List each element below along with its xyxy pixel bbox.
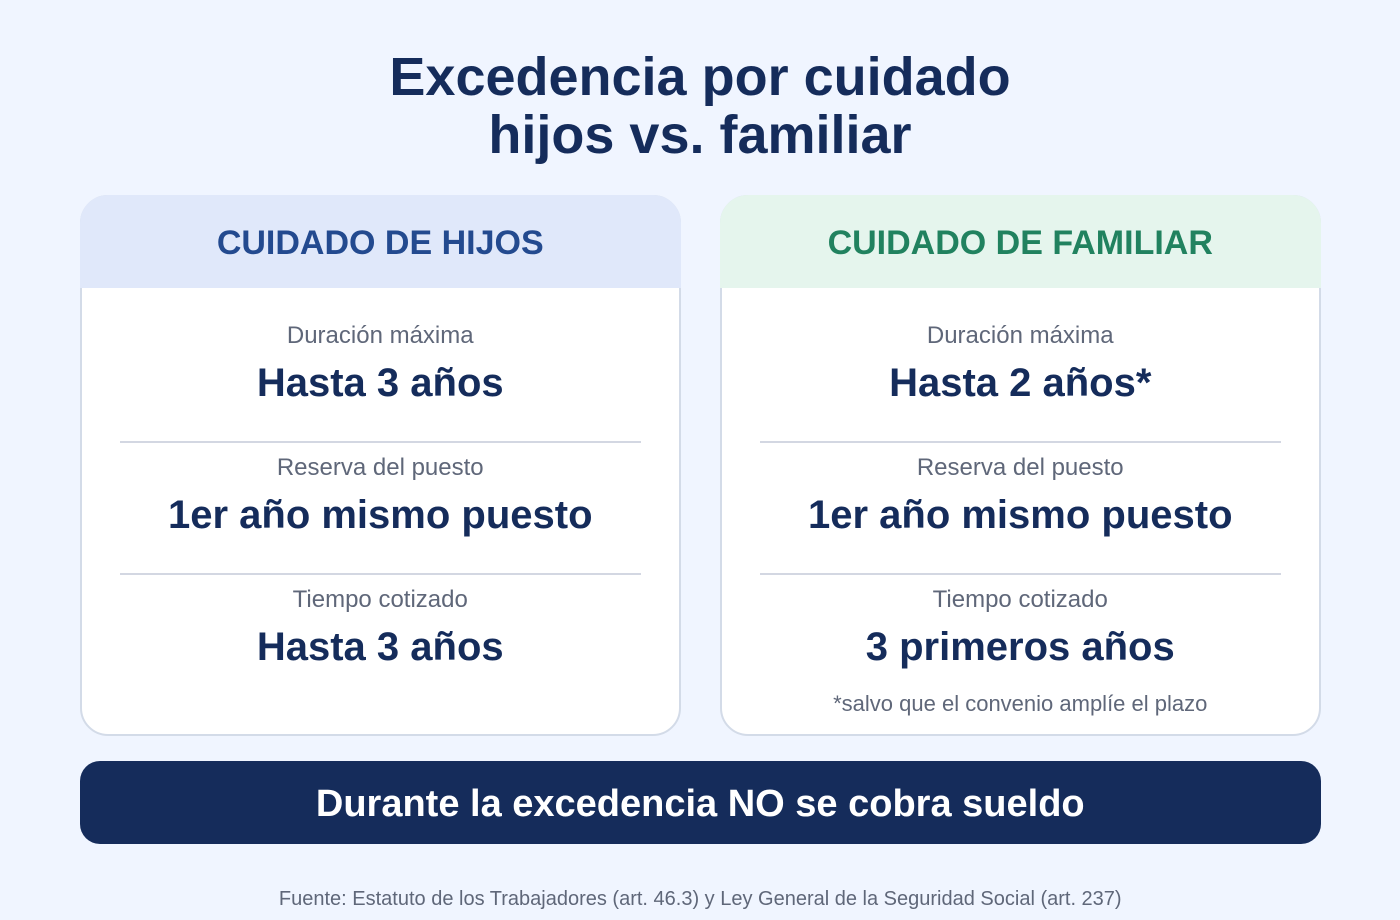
panel heading: cuidado de familiar: CUIDADO DE FAMILIAR (828, 224, 1213, 262)
label: tiempo cotizado: Tiempo cotizado (933, 586, 1108, 613)
value: duración: Hasta 2 años* (889, 361, 1151, 405)
value: duración: Hasta 3 años (257, 361, 504, 405)
panel heading: cuidado de familiar (720, 195, 1321, 288)
panel heading: cuidado de hijos (80, 195, 681, 288)
source text: Fuente: Estatuto de los Trabajadores (art. 46.3) y Ley General de la Seguridad Social (art. 237) (279, 888, 1122, 910)
label: duración máxima: Duración máxima (927, 322, 1114, 349)
label: tiempo cotizado: Tiempo cotizado (293, 586, 468, 613)
value: reserva: 1er año mismo puesto (808, 493, 1233, 537)
footnote: *salvo que el convenio amplíe el plazo (833, 691, 1207, 716)
banner (80, 761, 1321, 844)
panel: cuidado de familiar (720, 195, 1321, 736)
title: hijos vs. familiar (488, 105, 912, 165)
value: tiempo cotizado: Hasta 3 años (257, 625, 504, 669)
panel: cuidado de hijos (80, 195, 681, 736)
panel heading: cuidado de hijos: CUIDADO DE HIJOS (217, 224, 544, 262)
value: reserva: 1er año mismo puesto (168, 493, 593, 537)
label: duración máxima: Duración máxima (287, 322, 474, 349)
banner: Durante la excedencia NO se cobra sueldo (316, 783, 1085, 825)
label: reserva del puesto: Reserva del puesto (277, 454, 484, 481)
title: Excedencia por cuidado (389, 47, 1011, 107)
value: tiempo cotizado: 3 primeros años (866, 625, 1175, 669)
title (389, 47, 1011, 165)
label: reserva del puesto: Reserva del puesto (917, 454, 1124, 481)
